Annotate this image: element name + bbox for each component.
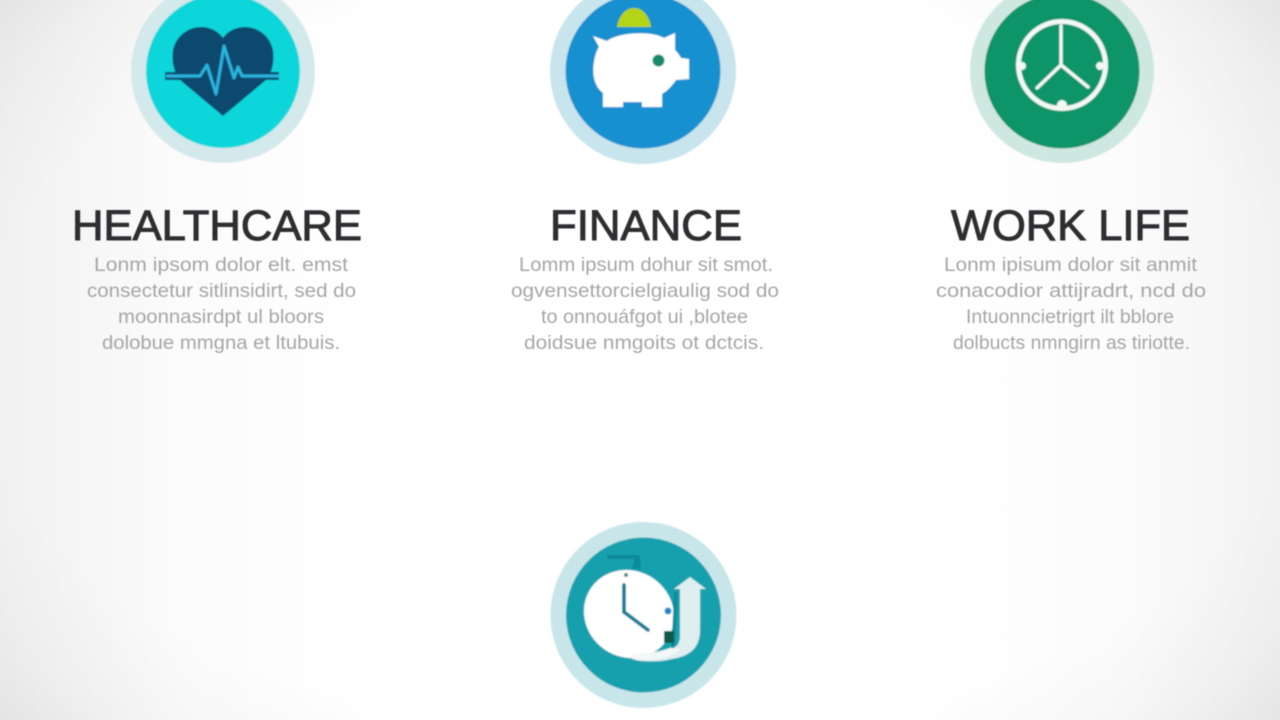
text block: finance description: to onnouáfgot ui ,blotee (541, 306, 748, 328)
text block: work life description: conacodior attijradrt, ncd do (936, 280, 1206, 302)
text block: finance description: ogvensettorcielgiaulig sod do (511, 280, 779, 302)
panel: healthcare (72, 0, 362, 354)
text block: healthcare description: consectetur sitlinsidirt, sed do (87, 280, 356, 302)
text block: healthcare description (87, 254, 356, 354)
text block: healthcare description: moonnasirdpt ul bloors (118, 306, 324, 328)
text block: work life description: Intuonncietrigrt ilt bblore (966, 306, 1174, 328)
heading: work life: WORK LIFE (951, 202, 1190, 250)
text block: work life description (936, 254, 1206, 354)
text block: healthcare description: dolobue mmgna et ltubuis. (102, 332, 340, 354)
panel: work life (936, 0, 1206, 354)
text block: work life description: dolbucts nmngirn as tiriotte. (953, 332, 1190, 354)
icon: piggy bank with coin (550, 0, 736, 164)
heading: finance: FINANCE (550, 202, 742, 250)
panel: time icon (550, 522, 736, 708)
panel: finance (511, 0, 779, 354)
text block: finance description (511, 254, 779, 354)
text block: work life description: Lonm ipisum dolor sit anmit (944, 254, 1198, 276)
text block: finance description: doidsue nmgoits ot dctcis. (524, 332, 764, 354)
icon: clock with upward arrow (550, 522, 736, 708)
heading: healthcare: HEALTHCARE (72, 202, 362, 250)
text block: healthcare description: Lonm ipsom dolor elt. emst (94, 254, 349, 276)
text block: finance description: Lomm ipsum dohur sit smot. (519, 254, 773, 276)
icon: heart with pulse line (131, 0, 315, 163)
icon: balance clock (970, 0, 1154, 163)
